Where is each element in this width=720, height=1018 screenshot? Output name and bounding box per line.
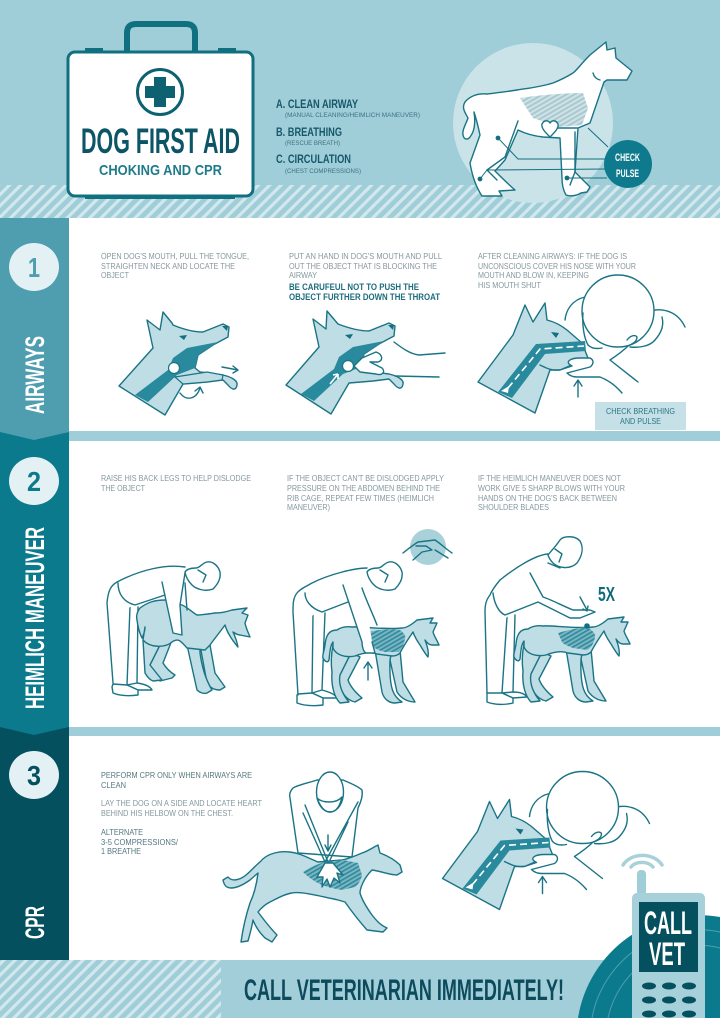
panel: first aid kit: [68, 24, 253, 199]
text: step 2b: [287, 474, 445, 512]
text: step 3: ALTERNATE: [101, 828, 143, 837]
text: step 1a: STRAIGHTEN NECK AND LOCATE THE: [101, 262, 235, 271]
text: step 3: CLEAN: [101, 781, 126, 790]
title: DOG FIRST AID: [81, 122, 240, 161]
label Heimlich: HEIMLICH MANEUVER: [20, 527, 50, 709]
text: step 2c: IF THE HEIMLICH MANEUVER DOES NOT: [478, 474, 621, 483]
text: step 3: [101, 771, 262, 856]
number 3: 3: [27, 760, 41, 791]
text: step 2c: [478, 474, 625, 512]
icon: hand position inset: [403, 529, 452, 565]
number 1: 1: [28, 252, 40, 283]
abc list: B. BREATHING: [276, 127, 342, 139]
text: step 2c: SHOULDER BLADES: [478, 503, 549, 512]
label 5X: 5X: [598, 584, 615, 606]
text: step 1b: AIRWAY: [289, 271, 318, 280]
icon: phone: VET: [649, 936, 685, 972]
text: step 1c: [478, 252, 636, 290]
subtitle: CHOKING AND CPR: [99, 162, 222, 179]
text: step 2a: RAISE HIS BACK LEGS TO HELP DISLODGE: [101, 474, 251, 483]
sidebar: section 1: [0, 218, 69, 440]
illustration: cpr compressions: [223, 772, 402, 942]
icon: phone: [632, 870, 705, 1018]
number 2: [9, 457, 59, 505]
abc list: A. CLEAN AIRWAY: [276, 99, 358, 111]
callout: check breathing: CHECK BREATHING: [606, 407, 675, 416]
number 2: 2: [27, 466, 41, 497]
text: step 3: PERFORM CPR ONLY WHEN AIRWAYS ARE: [101, 771, 252, 780]
text: step 2a: [101, 474, 251, 493]
number 3: [9, 751, 59, 799]
text: step 3: BEHIND HIS HELBOW ON THE CHEST.: [101, 809, 233, 818]
text: step 1a: OPEN DOG'S MOUTH, PULL THE TONGUE,: [101, 252, 249, 261]
sidebar: section 3: [0, 727, 69, 960]
text: step 1a: [101, 252, 249, 280]
text: step 1c: HIS MOUTH SHUT: [478, 281, 541, 290]
text: step 1b: OBJECT FURTHER DOWN THE THROAT: [289, 292, 440, 302]
label CPR: CPR: [20, 906, 50, 939]
text: step 1b: OUT THE OBJECT THAT IS BLOCKING THE: [289, 262, 437, 271]
icon: wifi arcs: [623, 855, 662, 867]
callout: check breathing: [595, 402, 686, 430]
text: step 1c: UNCONSCIOUS COVER HIS NOSE WITH YOUR: [478, 262, 636, 271]
text: step 3: 1 BREATHE: [101, 847, 141, 856]
panel: call banner: [221, 960, 720, 1018]
bottom stripes: [0, 960, 221, 1018]
text: step 2b: IF THE OBJECT CAN'T BE DISLODGED APPLY: [287, 474, 445, 483]
abc list: [276, 99, 420, 175]
callout: check breathing: AND PULSE: [620, 417, 661, 426]
sidebar: section 2: [0, 432, 69, 735]
illustration: remove object by hand: [286, 311, 445, 414]
white content area: [69, 218, 720, 960]
text: step 1c: MOUTH AND BLOW IN, KEEPING: [478, 271, 589, 280]
text: step 1b: PUT AN HAND IN DOG'S MOUTH AND PULL: [289, 252, 443, 261]
text: step 1b: BE CARUFEUL NOT TO PUSH THE: [289, 282, 419, 292]
illustration: mouth to snout: [478, 275, 685, 413]
number 1: [9, 243, 59, 291]
text: step 1b: [289, 252, 443, 302]
text: step 2b: PRESSURE ON THE ABDOMEN BEHIND THE: [287, 484, 440, 493]
text: step 2c: HANDS ON THE DOG'S BACK BETWEEN: [478, 494, 617, 503]
check pulse badge: CHECK: [615, 152, 640, 164]
text: step 3: LAY THE DOG ON A SIDE AND LOCATE HEART: [101, 799, 262, 808]
text: step 3: 3-5 COMPRESSIONS/: [101, 838, 179, 847]
illustration: dog pulse points: [453, 42, 652, 203]
text: step 1c: AFTER CLEANING AIRWAYS: IF THE DOG IS: [478, 252, 627, 261]
text: step 2c: WORK GIVE 5 SHARP BLOWS WITH YOUR: [478, 484, 625, 493]
icon: medical cross: [138, 70, 182, 114]
illustration: open dog mouth: [119, 312, 238, 415]
header stripes: [0, 185, 720, 218]
text: step 2a: THE OBJECT: [101, 484, 145, 493]
abc list: (RESCUE BREATH): [285, 140, 340, 147]
text: step 2b: MANEUVER): [287, 503, 330, 512]
check pulse badge: PULSE: [616, 168, 639, 180]
check pulse badge: [604, 140, 652, 188]
illustration: rescue breath: [442, 772, 650, 910]
abc list: C. CIRCULATION: [276, 154, 351, 166]
text: step 2b: RIB CAGE, REPEAT FEW TIMES (HEIMLICH: [287, 494, 434, 503]
label Airways: AIRWAYS: [20, 336, 50, 414]
text: step 1a: OBJECT: [101, 271, 129, 280]
abc list: (MANUAL CLEANING/HEIMLICH MANEUVER): [285, 112, 420, 119]
abc list: (CHEST COMPRESSIONS): [285, 168, 361, 175]
illustration: back blows: [485, 537, 630, 704]
bands: [69, 431, 720, 441]
illustration: raise back legs: [107, 562, 250, 696]
illustration: heimlich abdomen: [293, 529, 452, 706]
icon: signal circle: [578, 915, 720, 1018]
